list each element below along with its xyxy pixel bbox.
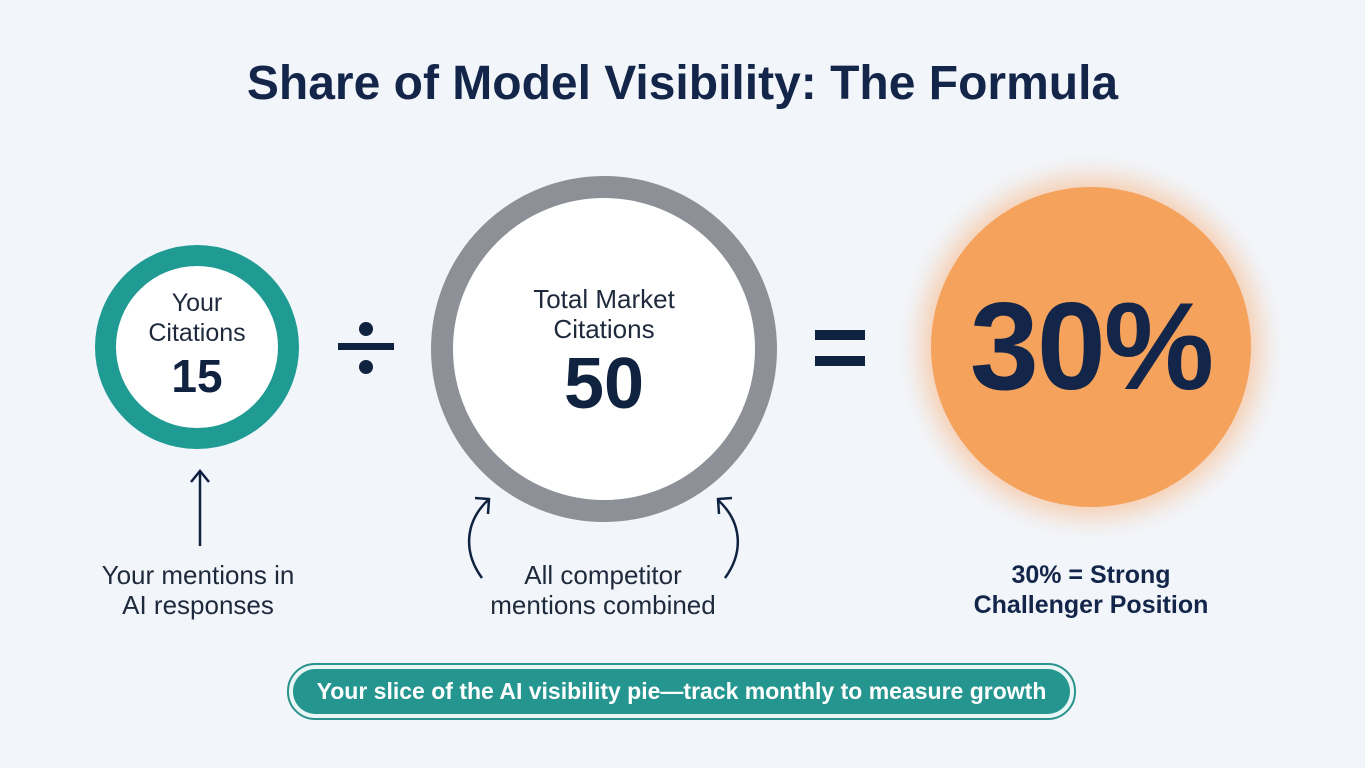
circle: your citations: Your [172, 289, 222, 317]
circle: your citations: Citations [148, 319, 246, 347]
title: Share of Model Visibility: The Formula [247, 57, 1118, 110]
label: strong challenger [974, 561, 1208, 619]
callout pill [287, 663, 1076, 720]
circle: total market citations [431, 176, 777, 522]
divide sign [338, 322, 394, 374]
label: all competitor mentions: All competitor [524, 560, 682, 590]
label: all competitor mentions [490, 560, 716, 620]
callout pill: Your slice of the AI visibility pie—track monthly to measure growth [317, 678, 1046, 704]
label: all competitor mentions: mentions combined [490, 590, 716, 620]
label: strong challenger: 30% = Strong [1011, 561, 1171, 589]
arrows: curved to total [468, 496, 740, 579]
circle: total market citations: Total Market [533, 284, 675, 314]
label: your mentions [102, 560, 294, 620]
circle: your citations [95, 245, 299, 449]
circle: total market citations: Citations [553, 314, 655, 344]
result circle [931, 187, 1251, 507]
circle: total market citations: 50 [564, 344, 644, 424]
equals sign [815, 330, 865, 340]
label: your mentions: AI responses [122, 590, 274, 620]
label: strong challenger: Challenger Position [974, 591, 1208, 619]
circle: your citations: 15 [171, 350, 223, 402]
result circle: 30% [970, 278, 1212, 416]
label: your mentions: Your mentions in [102, 560, 294, 590]
arrow: up to your citations [190, 469, 210, 546]
